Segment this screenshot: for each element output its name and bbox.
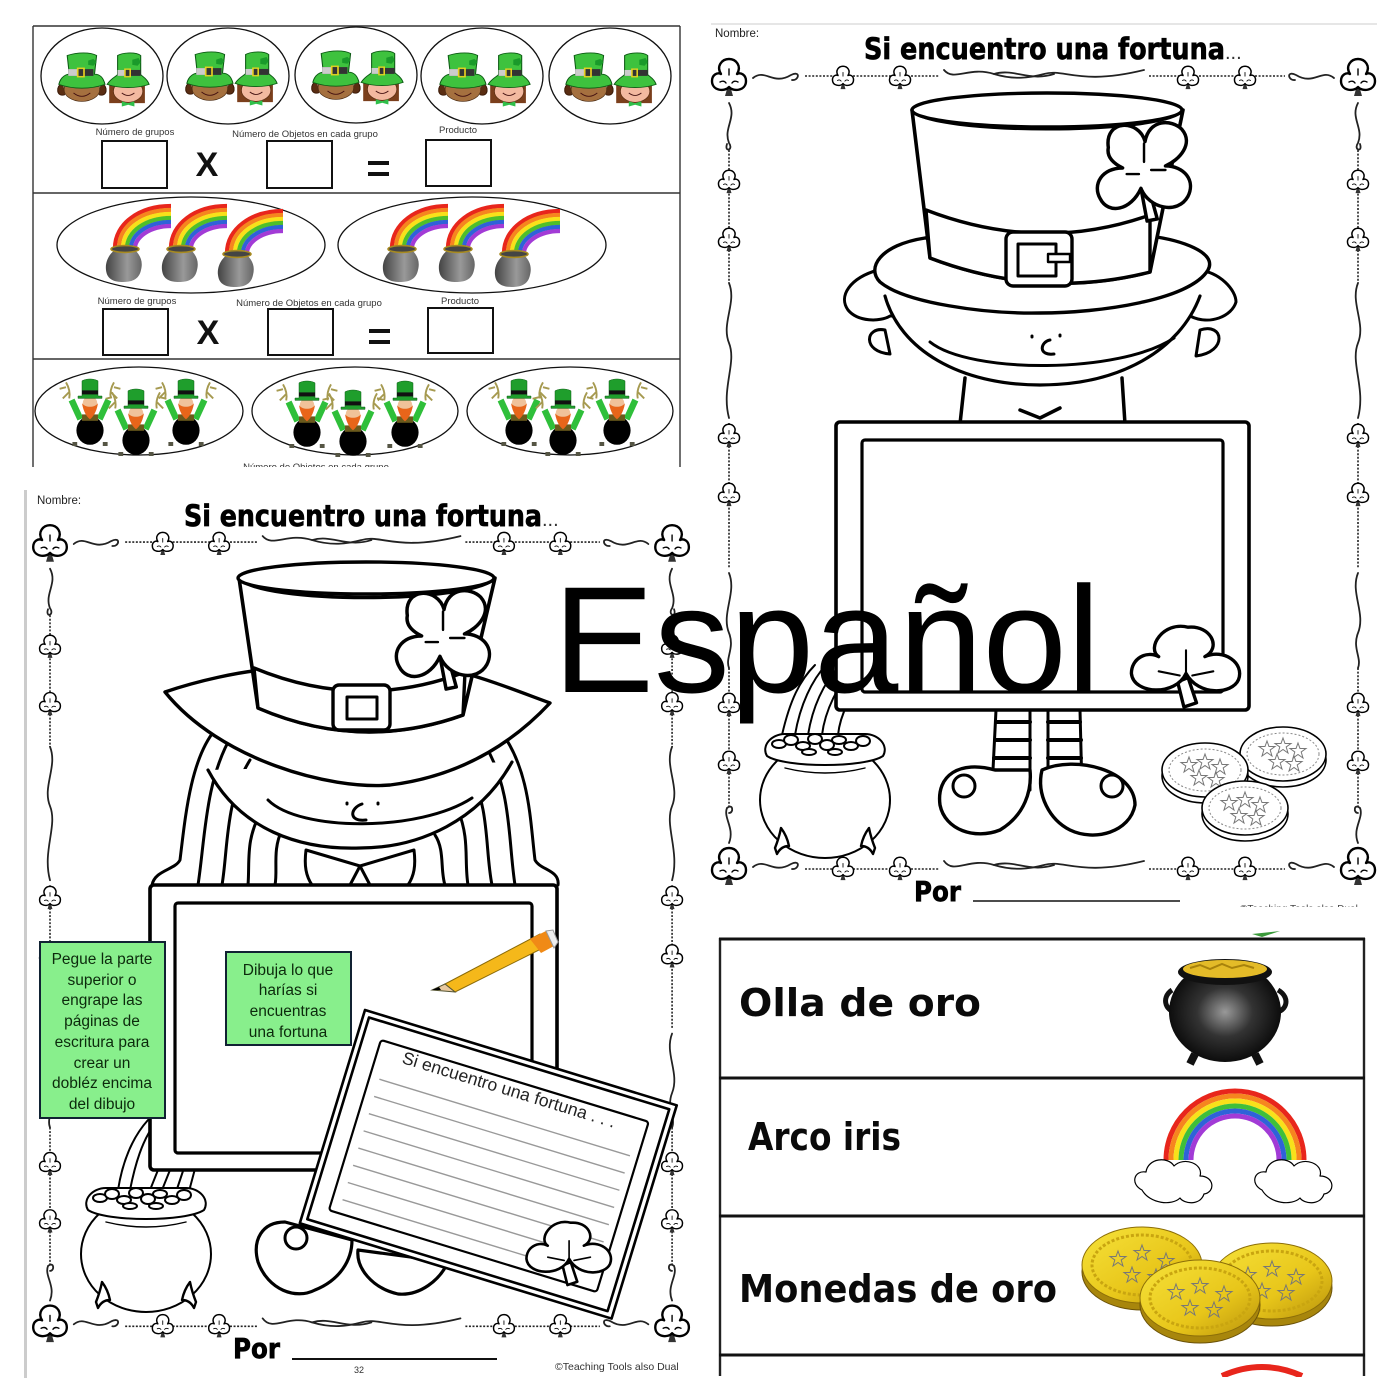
worksheet title: Si encuentro una fortuna — [864, 32, 1225, 66]
hat buckle — [333, 685, 390, 730]
girl leprechaun drawing — [81, 562, 558, 1312]
row 3 groups of leprechauns — [35, 367, 673, 456]
board shamrock — [1131, 626, 1240, 707]
table rows — [719, 939, 1365, 1355]
clover on hat — [1097, 123, 1190, 221]
decorative shamrock border — [33, 525, 689, 1342]
language title: Español — [553, 556, 1100, 725]
callout: glue instructions: dobléz encima — [52, 1075, 152, 1092]
pencil — [432, 930, 558, 992]
callout: drawing instructions: Dibuja lo que — [243, 962, 333, 979]
writing board — [836, 422, 1249, 710]
bottom mask — [700, 1377, 1400, 1400]
face — [208, 762, 512, 848]
icon: black pot of gold — [1166, 959, 1286, 1064]
callout: drawing instructions — [226, 952, 351, 1045]
row 2 groups of rainbow pots — [57, 197, 606, 293]
row 1 equation: Número de grupos — [96, 127, 175, 138]
leaf tip — [1252, 931, 1280, 937]
row 3 labels: Número de Objetos en cada grupo — [243, 462, 389, 473]
panel: multiplication worksheet — [33, 26, 680, 473]
row 1 groups of leprechaun heads — [41, 27, 671, 124]
hat crown — [912, 110, 1183, 283]
name label: Nombre: — [37, 495, 81, 507]
hat buckle — [1006, 232, 1072, 286]
face — [885, 296, 1200, 385]
rainbow behind board — [118, 1120, 196, 1195]
title ellipsis: ... — [542, 509, 559, 531]
callout: glue instructions: escritura para — [55, 1034, 150, 1051]
word: rainbow: Arco iris — [748, 1115, 901, 1159]
icon: gold coins — [1082, 1227, 1332, 1343]
row 2 equation: X — [197, 314, 220, 352]
shoes — [256, 1222, 448, 1294]
callout: drawing instructions: encuentras — [250, 1003, 327, 1020]
row 1 equation: Número de Objetos en cada grupo — [232, 129, 378, 140]
coins — [1162, 727, 1326, 841]
worksheet frame — [33, 26, 680, 467]
hat brim — [875, 236, 1210, 313]
word: gold coins: Monedas de oro — [739, 1267, 1057, 1311]
row 2 equation: Número de Objetos en cada grupo — [236, 298, 382, 309]
worksheet title: Si encuentro una fortuna — [184, 499, 542, 533]
hair and ears — [845, 270, 1236, 320]
hat brim — [165, 670, 550, 786]
pot of gold — [760, 734, 890, 858]
bow — [305, 850, 415, 885]
next row rainbow tip — [1222, 1367, 1302, 1376]
body — [960, 378, 1125, 424]
writing page card — [300, 1010, 677, 1319]
name label: Nombre: — [715, 28, 759, 40]
author line: Por — [233, 1332, 280, 1365]
row 2 equation — [98, 296, 493, 355]
callout: drawing instructions: una fortuna — [249, 1024, 328, 1041]
sheet edge — [24, 490, 27, 1378]
hair strands — [152, 730, 558, 885]
word: pot of gold: Olla de oro — [739, 981, 981, 1025]
copyright clipped: ©Teaching Tools also Dual — [1240, 904, 1358, 915]
callout: glue instructions: del dibujo — [69, 1096, 135, 1113]
panel: vocabulary cards — [719, 931, 1365, 1376]
pot of gold — [81, 1188, 211, 1312]
title ellipsis: ... — [1225, 42, 1242, 64]
row 1 equation: X — [196, 146, 219, 184]
callout: glue instructions: crear un — [74, 1055, 130, 1072]
callout: glue instructions: Pegue la parte — [52, 951, 152, 968]
callout: glue instructions: páginas de — [64, 1013, 140, 1030]
table lines — [720, 938, 1364, 1376]
boy leprechaun drawing — [760, 93, 1326, 858]
row 2 equation: Número de grupos — [98, 296, 177, 307]
author line: Por — [914, 875, 961, 908]
panel: boy leprechaun worksheet — [711, 24, 1377, 915]
top edge — [711, 23, 1377, 25]
row 2 equation: Producto — [441, 296, 479, 307]
page number: 32 — [354, 1365, 364, 1375]
panel: girl leprechaun worksheet — [24, 490, 689, 1378]
callout: glue instructions: engrape las — [61, 992, 143, 1009]
legs and shoes — [940, 710, 1135, 835]
hat band — [254, 668, 465, 732]
copyright: ©Teaching Tools also Dual — [555, 1361, 679, 1373]
callout: glue instructions — [40, 942, 165, 1118]
hat band — [926, 210, 1150, 283]
rainbow behind board — [782, 665, 870, 735]
row 1 equation — [96, 125, 491, 188]
mask below right worksheet — [1200, 907, 1400, 927]
hat crown — [239, 578, 495, 732]
decorative shamrock border — [712, 59, 1375, 885]
clover on hat — [396, 591, 489, 689]
callout: drawing instructions: harías si — [259, 982, 317, 999]
writing page card: Si encuentro una fortuna . . . — [400, 1048, 618, 1132]
writing board — [150, 885, 557, 1170]
icon: rainbow with clouds — [1135, 1091, 1332, 1203]
sheet background — [24, 490, 688, 1378]
callout: glue instructions: superior o — [68, 972, 136, 989]
row 1 equation: Producto — [439, 125, 477, 136]
